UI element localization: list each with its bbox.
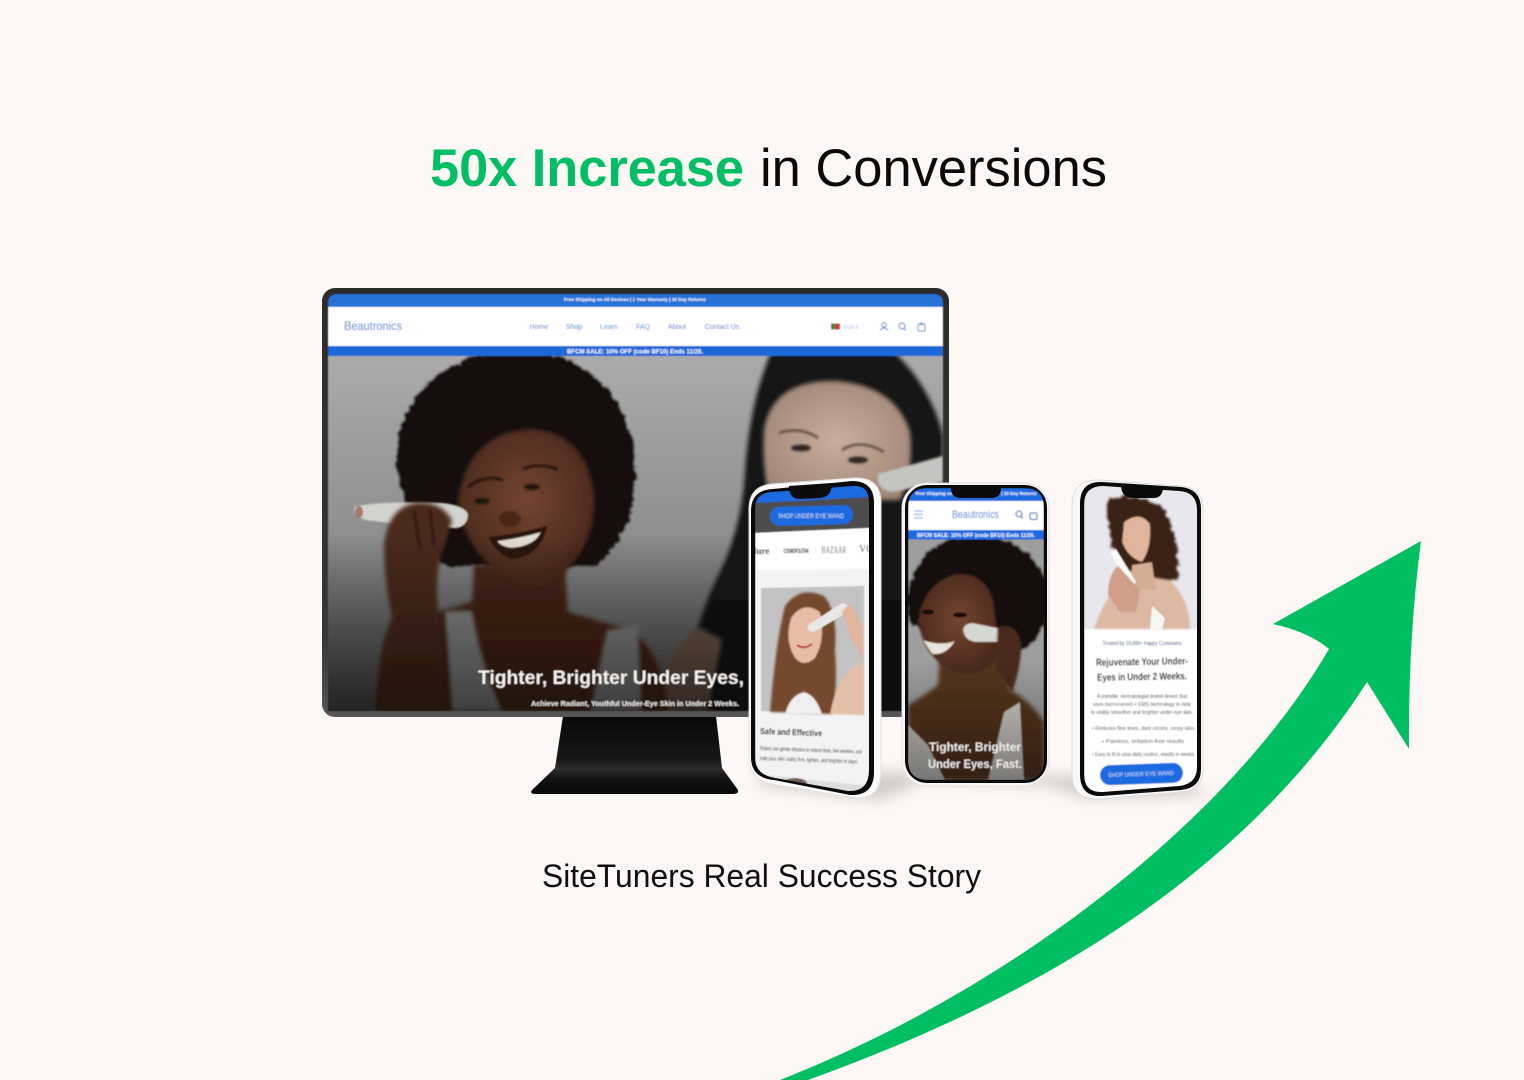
safe and effective text: Safe and Effective (760, 726, 822, 738)
woman on left (354, 350, 668, 711)
phone 3 paragraph: A portable, dermatologist-tested device that (1097, 694, 1188, 700)
phone 2 headline: Tighter, Brighter (929, 740, 1021, 754)
phone 3 heading: Eyes in Under 2 Weeks. (1097, 671, 1187, 684)
navigation bar (328, 307, 943, 346)
phone 2 body (902, 483, 1049, 786)
phone 3 paragraph: uses microcurrent + EMS technology to help (1093, 702, 1191, 708)
phone 2 nav: Beautronics (952, 509, 999, 521)
desktop monitor mockup (322, 288, 949, 794)
press logos: lure (754, 546, 769, 556)
phone 3 button: SHOP UNDER EYE WAND (1108, 771, 1175, 779)
dark band with button: SHOP UNDER EYE WAND (778, 514, 845, 520)
sale banner: BFCM SALE: 10% OFF (code BF10) Ends 11/26. (567, 348, 703, 356)
safe and effective text: Rollers use gentle vibration to reduce lines, fine wrinkles, and (760, 746, 862, 756)
monitor stand (531, 716, 738, 794)
phone 2 hero photo (908, 536, 1048, 780)
dark band with button (755, 486, 869, 534)
phone 2 sale banner: BFCM SALE: 10% OFF (code BF10) Ends 11/26. (917, 533, 1036, 539)
phone 2 headline (928, 740, 1022, 771)
title (430, 139, 1107, 198)
phone mockup 2 (902, 483, 1049, 786)
woman on right (655, 350, 943, 711)
navigation bar: FAQ (636, 324, 651, 331)
top announcement bar (328, 294, 943, 307)
monitor screen (328, 294, 943, 711)
phone 2 top bar: Free Shipping on (916, 491, 953, 496)
hero headline: Tighter, Brighter Under Eyes, (478, 668, 744, 689)
hero subheadline: Achieve Radiant, Youthful Under-Eye Skin in Under 2 Weeks. (531, 701, 739, 708)
press logos: BAZAAR (822, 545, 846, 555)
phone 2 notch (951, 488, 1001, 498)
phone 2 top bar: | 30 Day Returns (1001, 491, 1037, 496)
phone 3 paragraph (1091, 694, 1193, 716)
navigation bar: Shop (566, 324, 582, 331)
phone 3 paragraph: to visibly smoother and brighter under-eye skin. (1091, 710, 1193, 716)
phone 2 screen (908, 488, 1048, 780)
phone 2 sale banner (908, 530, 1044, 540)
sale banner (328, 346, 943, 356)
phone mockup 1 (749, 478, 881, 798)
phone 2 headline: Under Eyes, Fast. (928, 757, 1022, 771)
hero photo (328, 350, 943, 711)
phone 3 notch (1121, 484, 1163, 498)
monitor bezel (322, 288, 949, 717)
press logos: VO (859, 544, 873, 555)
phone 3 bullets (1092, 726, 1194, 758)
phone 3 photo (1084, 484, 1198, 630)
navigation bar: Learn (600, 324, 618, 331)
navigation bar: EUR € (844, 325, 859, 331)
phone 3 bullets: • Easy to fit in your daily routine, results in weeks (1092, 752, 1194, 758)
phone 3 button (1100, 763, 1183, 785)
safe and effective text (760, 726, 862, 765)
title: in Conversions (760, 139, 1107, 198)
title: 50x Increase (430, 139, 744, 198)
safe and effective text: help your skin visibly firm, tighten, and brighten in days. (760, 756, 858, 765)
navigation bar: Home (530, 324, 548, 331)
phone shadows (760, 770, 1210, 800)
hero shade (328, 538, 902, 712)
phone 1 screen (754, 480, 873, 795)
phone 3 heading: Rejuvenate Your Under- (1096, 656, 1188, 669)
green growth arrow (780, 541, 1421, 1080)
phone 2 nav (908, 501, 1044, 530)
navigation bar: Contact Us (705, 324, 740, 331)
phone 3 heading (1096, 656, 1188, 684)
navigation bar: About (668, 324, 686, 331)
press logos: COSMOPOLITAN (784, 548, 809, 555)
phone 3 body (1072, 480, 1203, 799)
product photo (761, 586, 864, 715)
phone mockup 3 (1072, 480, 1203, 799)
phone 3 eyebrow: Trusted by 10,000+ Happy Customers (1102, 641, 1182, 647)
top announcement bar: Free Shipping on All Devices | 1 Year Warranty | 30 Day Returns (564, 297, 707, 302)
phone 3 bullets: • Painless, irritation-free results (1102, 739, 1185, 745)
phone 3 screen (1084, 484, 1198, 796)
phone 3 bullets: • Reduces fine lines, dark circles, crepy skin (1092, 726, 1194, 732)
phone 1 body (749, 478, 881, 798)
subtitle: SiteTuners Real Success Story (542, 858, 981, 894)
press logos (754, 528, 873, 570)
phone 2 top bar (908, 488, 1044, 501)
phone 1 notch (789, 483, 832, 499)
navigation bar: Beautronics (344, 319, 402, 333)
